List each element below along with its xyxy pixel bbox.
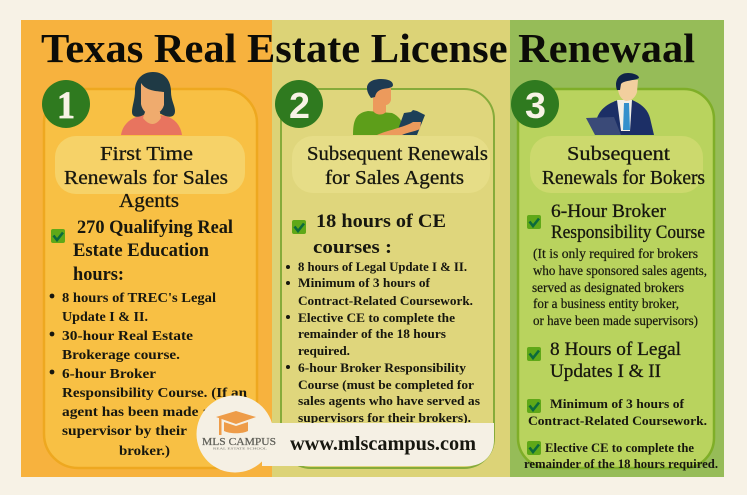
list: sales agent requirements: Contract-Related Coursework. — [298, 293, 473, 308]
panel: column 3 background — [510, 20, 724, 477]
text block: qualifying hours: 270 Qualifying Real — [77, 218, 233, 238]
list: first time requirements — [50, 290, 248, 458]
text block: 18 hours — [313, 212, 446, 258]
panel: subsequent renewals for sales agents — [275, 79, 494, 468]
panel: first time renewals — [42, 72, 257, 468]
text block: broker note: for a business entity broker, — [533, 296, 679, 311]
icon: badge 3: 3 — [525, 85, 546, 126]
text block: broker note: who have sponsored sales agents, — [533, 263, 707, 278]
icon: check — [527, 215, 541, 229]
list: sales agent requirements: 6-hour Broker Responsibility — [298, 360, 467, 375]
list: sales agent requirements: Course (must be completed for — [298, 377, 474, 392]
heading pill — [530, 136, 705, 193]
text block: elective CE — [524, 440, 718, 471]
text block: qualifying hours: Estate Education — [73, 241, 210, 261]
text block: broker note: (It is only required for brokers — [533, 246, 698, 261]
icon: businessman with laptop — [586, 73, 654, 135]
list: sales agent requirements: remainder of the 18 hours — [298, 326, 446, 341]
text block: contract coursework — [528, 396, 707, 428]
list: first time requirements: Responsibility Course. (If an — [62, 385, 248, 400]
heading pill: First Time — [100, 143, 193, 165]
heading pill: Renewals for Sales — [64, 167, 228, 189]
text block: legal updates: 8 Hours of Legal — [550, 339, 681, 360]
list: sales agent requirements: Minimum of 3 hours of — [298, 275, 431, 290]
list: first time requirements: 6-hour Broker — [62, 366, 156, 381]
text block: legal updates: Updates I & II — [550, 361, 661, 382]
panel: column 1 background — [21, 20, 272, 477]
icon: woman — [121, 72, 182, 135]
heading pill: Subsequent Renewals — [307, 143, 488, 165]
icon: badge 2: 2 — [289, 85, 310, 126]
icon: badge 1: 1 — [57, 84, 75, 127]
icon: badge 3 — [511, 80, 559, 128]
logo: MLS Campus: MLS CAMPUS — [202, 437, 276, 448]
icon: check — [527, 347, 541, 361]
heading pill: Renewals for Bokers — [542, 167, 705, 189]
list: first time requirements: 30-hour Real Estate — [62, 328, 193, 343]
list: first time requirements: 8 hours of TREC's Legal — [62, 290, 216, 305]
text block: broker note: served as designated brokers — [532, 280, 684, 295]
text block: legal updates — [550, 339, 681, 382]
text block: contract coursework: Minimum of 3 hours of — [550, 396, 685, 411]
list: first time requirements: Update I & II. — [62, 309, 148, 324]
text block: contract coursework: Contract-Related Coursework. — [528, 413, 707, 428]
list: first time requirements: Brokerage course. — [62, 347, 180, 362]
title: Texas Real Estate License Renewaal — [41, 25, 695, 71]
icon: check — [292, 220, 306, 234]
list: sales agent requirements: 8 hours of Legal Update I & II. — [298, 259, 467, 274]
text block: qualifying hours: hours: — [73, 265, 124, 285]
icon: check — [527, 399, 541, 413]
icon: check — [51, 229, 65, 243]
text block: elective CE: remainder of the 18 hours required. — [524, 456, 718, 471]
list: sales agent requirements: required. — [298, 343, 350, 358]
text block: elective CE: Elective CE to complete the — [545, 440, 694, 455]
heading pill — [55, 136, 245, 212]
text block: 18 hours: 18 hours of CE — [316, 212, 446, 232]
panel: subsequent renewals for brokers — [511, 73, 718, 471]
icon: check — [527, 441, 541, 455]
list: sales agent requirements — [286, 259, 480, 425]
logo: MLS Campus: REAL ESTATE SCHOOL — [213, 446, 267, 450]
icon: badge 2 — [275, 80, 323, 128]
text block: broker note: or have been made supervisors) — [533, 313, 698, 328]
text block: 18 hours: courses : — [313, 238, 392, 258]
text block: 6-hour course: Responsibility Course — [551, 222, 705, 243]
heading pill: Subsequent — [567, 143, 670, 165]
website banner: www.mlscampus.com — [290, 433, 476, 455]
list: sales agent requirements: supervisors for their brokers). — [298, 410, 471, 425]
heading pill: Agents — [119, 190, 179, 212]
list: first time requirements: broker.) — [119, 443, 170, 458]
icon: badge 1 — [42, 80, 90, 128]
icon: man with clipboard — [353, 79, 425, 135]
list: first time requirements: supervisor by their — [62, 423, 187, 438]
heading pill — [292, 136, 490, 193]
website banner — [262, 423, 494, 466]
list: sales agent requirements: sales agents who have served as — [298, 393, 480, 408]
logo: MLS Campus — [196, 396, 276, 472]
text block: 6-hour course: 6-Hour Broker — [551, 201, 667, 222]
text block: qualifying hours — [73, 218, 233, 285]
list: first time requirements: agent has been made a — [62, 404, 210, 419]
text block: 6-hour course — [551, 201, 705, 243]
panel: column 2 background — [272, 20, 510, 477]
heading pill: for Sales Agents — [325, 167, 464, 189]
list: sales agent requirements: Elective CE to complete the — [298, 310, 455, 325]
text block: broker note — [532, 246, 707, 328]
